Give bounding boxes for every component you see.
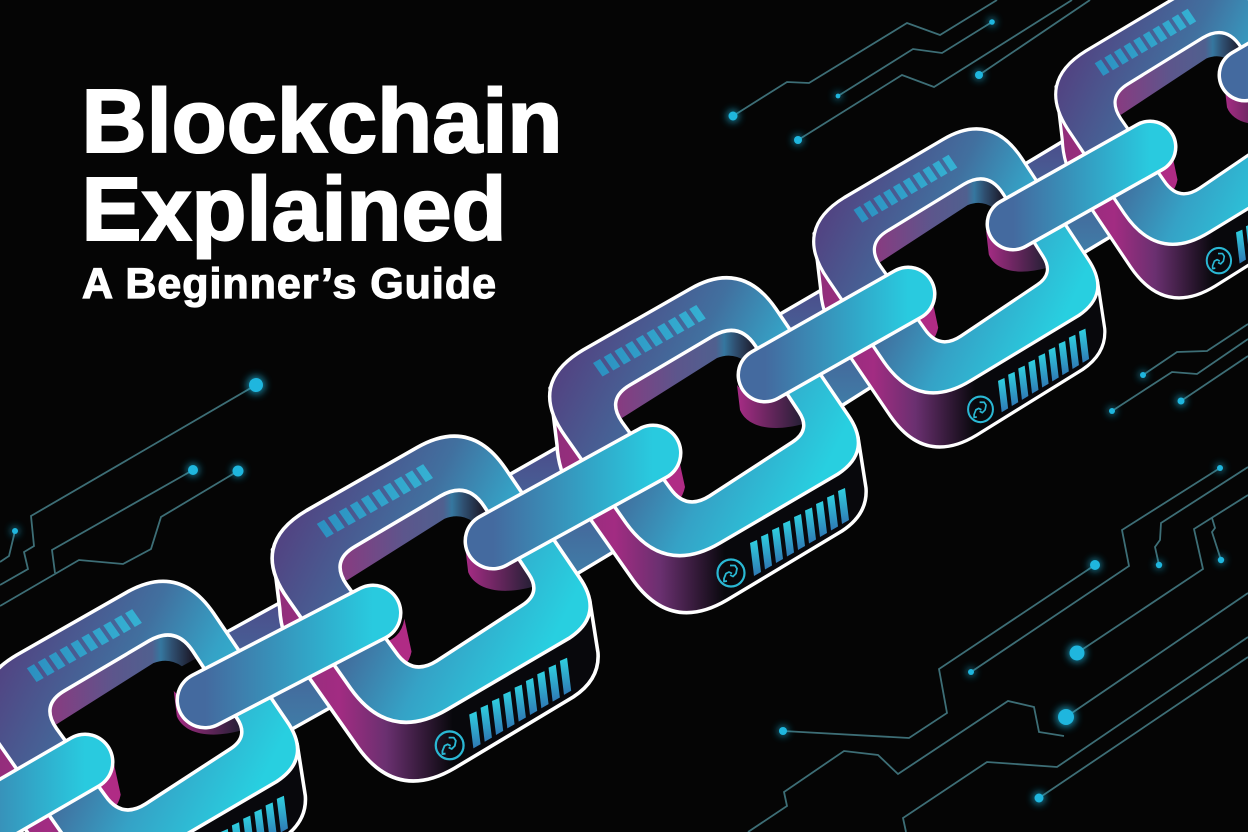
- circuit traces: right middle: [1112, 324, 1248, 411]
- chain link 5: [1056, 0, 1248, 298]
- circuit nodes: bottom right: [778, 464, 1225, 804]
- circuit nodes: top right: [727, 18, 996, 145]
- capsule connector 5: [1245, 20, 1248, 75]
- title: Blockchain: [82, 72, 562, 172]
- circuit traces: left: [0, 385, 256, 606]
- circuit traces: top right: [733, 0, 1090, 140]
- capsule connector 1: [205, 613, 373, 700]
- title: [82, 72, 562, 260]
- chain link 4: [814, 129, 1105, 447]
- capsule connector 2: [493, 453, 653, 541]
- chain link 1: [0, 581, 305, 832]
- chain link 3: [550, 278, 866, 613]
- chain link 2: [272, 436, 598, 781]
- connector bands behind the links: [225, 137, 1125, 733]
- capsule connector 4: [1013, 147, 1150, 224]
- title: Explained: [82, 160, 506, 260]
- circuit traces: bottom right: [748, 467, 1248, 832]
- capsule connector 3: [765, 294, 908, 375]
- circuit nodes: right middle: [1108, 371, 1186, 415]
- subtitle: A Beginner’s Guide: [82, 260, 496, 308]
- capsule connector 0: [0, 762, 85, 832]
- circuit nodes: left: [11, 376, 265, 535]
